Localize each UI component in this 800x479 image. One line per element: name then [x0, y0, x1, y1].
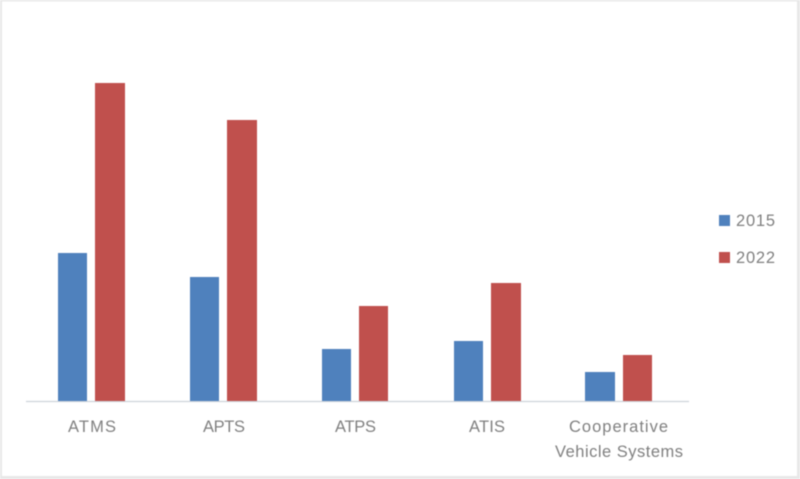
category labels	[68, 418, 683, 461]
category labels: APTS	[203, 418, 245, 436]
bars: Cooperative Vehicle Systems	[585, 355, 652, 401]
category labels: ATIS	[469, 418, 505, 436]
category labels: ATPS	[335, 418, 376, 436]
legend: 2015	[736, 212, 775, 230]
legend	[719, 212, 775, 267]
category labels: Cooperative	[569, 418, 668, 436]
bars: ATIS	[454, 283, 521, 401]
bars: ATPS	[322, 306, 388, 401]
category labels: ATMS	[68, 418, 116, 436]
category labels: Vehicle Systems	[555, 443, 683, 461]
bars: APTS	[190, 120, 257, 401]
bars: ATMS	[58, 83, 125, 401]
legend: 2022	[736, 249, 775, 267]
